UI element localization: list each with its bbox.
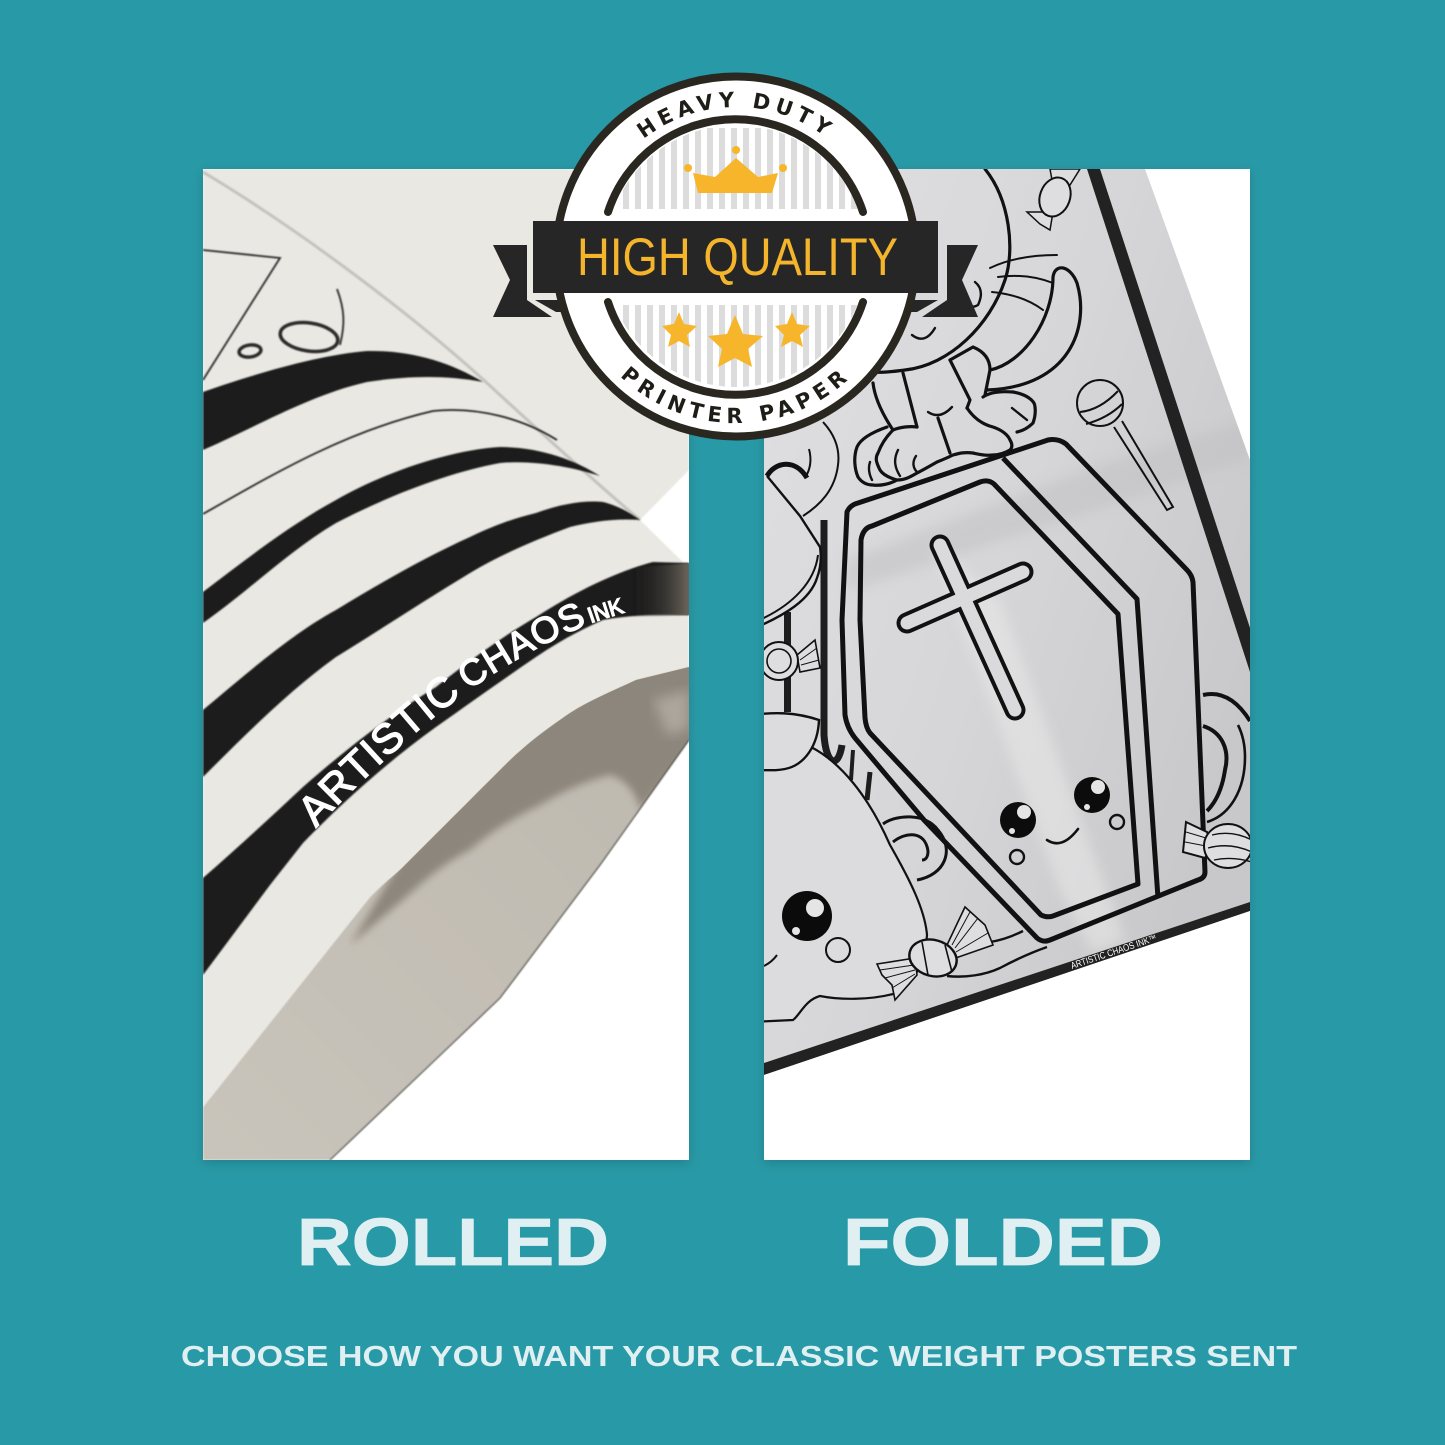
- black stripes: [203, 351, 689, 975]
- label: folded: FOLDED: [843, 1205, 1163, 1280]
- inner arc bottom: [608, 302, 863, 395]
- icon: three stars: [662, 312, 810, 367]
- fold creases shading: [847, 420, 1250, 953]
- black border right: [1087, 169, 1250, 672]
- badge: high quality seal: [493, 72, 978, 440]
- printed outlines at top of roll: [203, 250, 343, 380]
- illustration: ring and ghost hat: [764, 421, 840, 626]
- shaded inside of roll: [350, 650, 700, 945]
- illustration: coffin cross: [907, 545, 1023, 710]
- heading: high quality: HIGH QUALITY: [577, 228, 898, 287]
- inner arc top: [608, 119, 863, 212]
- illustration: background stripes: [788, 520, 870, 800]
- illustration: lollipop: [1077, 380, 1173, 510]
- panel: rolled poster photo: [201, 169, 691, 1165]
- black border bottom: [764, 902, 1250, 1075]
- illustration: pumpkin: [750, 713, 927, 1022]
- illustration: coffin: [842, 440, 1205, 941]
- illustration: cat: [855, 169, 1081, 485]
- brand footer: ARTISTIC CHAOS INK™: [1069, 933, 1158, 972]
- label: rolled: ROLLED: [297, 1205, 609, 1280]
- faded end of stripe: [630, 563, 689, 617]
- striped inner field: [623, 128, 857, 387]
- inside of roll: [203, 667, 689, 1160]
- illustration: striped candy right: [1183, 822, 1252, 868]
- illustration: round candy left: [760, 640, 820, 680]
- light patch inside roll: [653, 690, 689, 736]
- ribbon main band: [533, 221, 938, 293]
- badge disc: [556, 76, 916, 436]
- illustration: wrapped candy bottom: [877, 907, 993, 1000]
- ribbon left tail: [493, 245, 552, 317]
- ribbon left fold: [535, 300, 565, 312]
- panel: folded poster photo: [750, 169, 1252, 1160]
- illustration: candy top: [1027, 169, 1080, 230]
- caption: CHOOSE HOW YOU WANT YOUR CLASSIC WEIGHT POSTERS SENT: [181, 1341, 1297, 1373]
- roll lip shadow: [330, 740, 689, 1160]
- icon: crown: [684, 146, 787, 193]
- brand text on stripe: ARTISTIC CHAOS INK: [302, 597, 626, 830]
- illustration: right ring: [1203, 694, 1250, 822]
- heading: printer paper: PRINTER PAPER: [621, 366, 848, 424]
- upper crease: [203, 172, 640, 520]
- illustration: coffin face: [1000, 777, 1124, 864]
- ribbon right tail: [922, 245, 978, 317]
- ribbon right fold: [908, 300, 938, 312]
- folded paper sheet: [764, 169, 1250, 1075]
- heading: heavy duty: HEAVY DUTY: [636, 92, 834, 138]
- illustration: swirl: [883, 817, 946, 880]
- illustration: curl near bottom: [947, 931, 1047, 977]
- thin printed line: [203, 410, 557, 514]
- rolled paper sheet: [203, 169, 689, 1107]
